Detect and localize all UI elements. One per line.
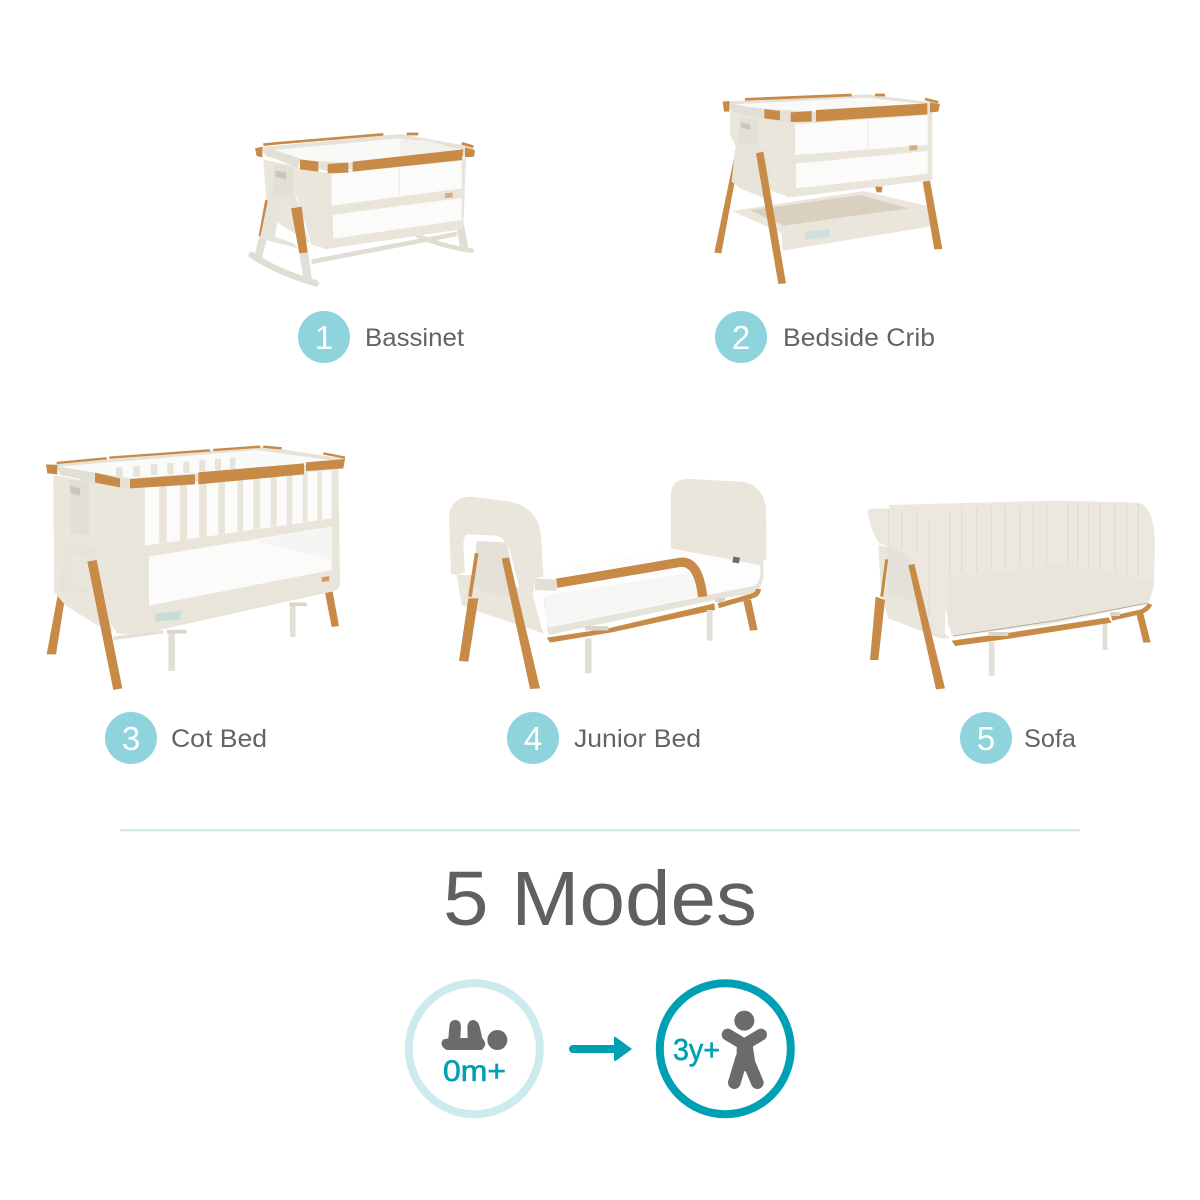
product: bassinet xyxy=(252,134,475,283)
icon: child xyxy=(728,1011,761,1083)
mode label: sofa: Sofa xyxy=(1024,725,1076,753)
arrow xyxy=(573,1037,632,1061)
mode label: junior bed xyxy=(507,712,701,764)
mode label: cot bed: 3 xyxy=(122,720,140,757)
mode label: sofa xyxy=(960,712,1076,764)
product: cot bed xyxy=(46,446,346,690)
mode label: bassinet: Bassinet xyxy=(365,324,464,352)
mode label: bedside crib xyxy=(715,311,935,363)
mode label: bassinet xyxy=(298,311,464,363)
age icon: 0 months plus xyxy=(409,983,540,1114)
product: bedside crib xyxy=(714,94,942,284)
product: junior bed xyxy=(449,479,767,689)
product: sofa xyxy=(868,501,1155,689)
mode label: junior bed: 4 xyxy=(524,720,542,757)
heading: 5 Modes: 5 Modes xyxy=(443,856,757,942)
mode label: cot bed xyxy=(105,712,267,764)
mode label: sofa: 5 xyxy=(977,720,995,757)
age icon: 0 months plus: 0m+ xyxy=(443,1055,506,1088)
mode label: junior bed: Junior Bed xyxy=(574,725,701,753)
icon: lying baby xyxy=(441,1020,507,1050)
mode label: bedside crib: 2 xyxy=(732,319,750,356)
mode label: bassinet: 1 xyxy=(315,319,333,356)
mode label: bedside crib: Bedside Crib xyxy=(783,324,935,352)
age icon: 3 years plus xyxy=(660,983,791,1114)
mode label: cot bed: Cot Bed xyxy=(171,725,267,753)
age icon: 3 years plus: 3y+ xyxy=(673,1032,720,1067)
